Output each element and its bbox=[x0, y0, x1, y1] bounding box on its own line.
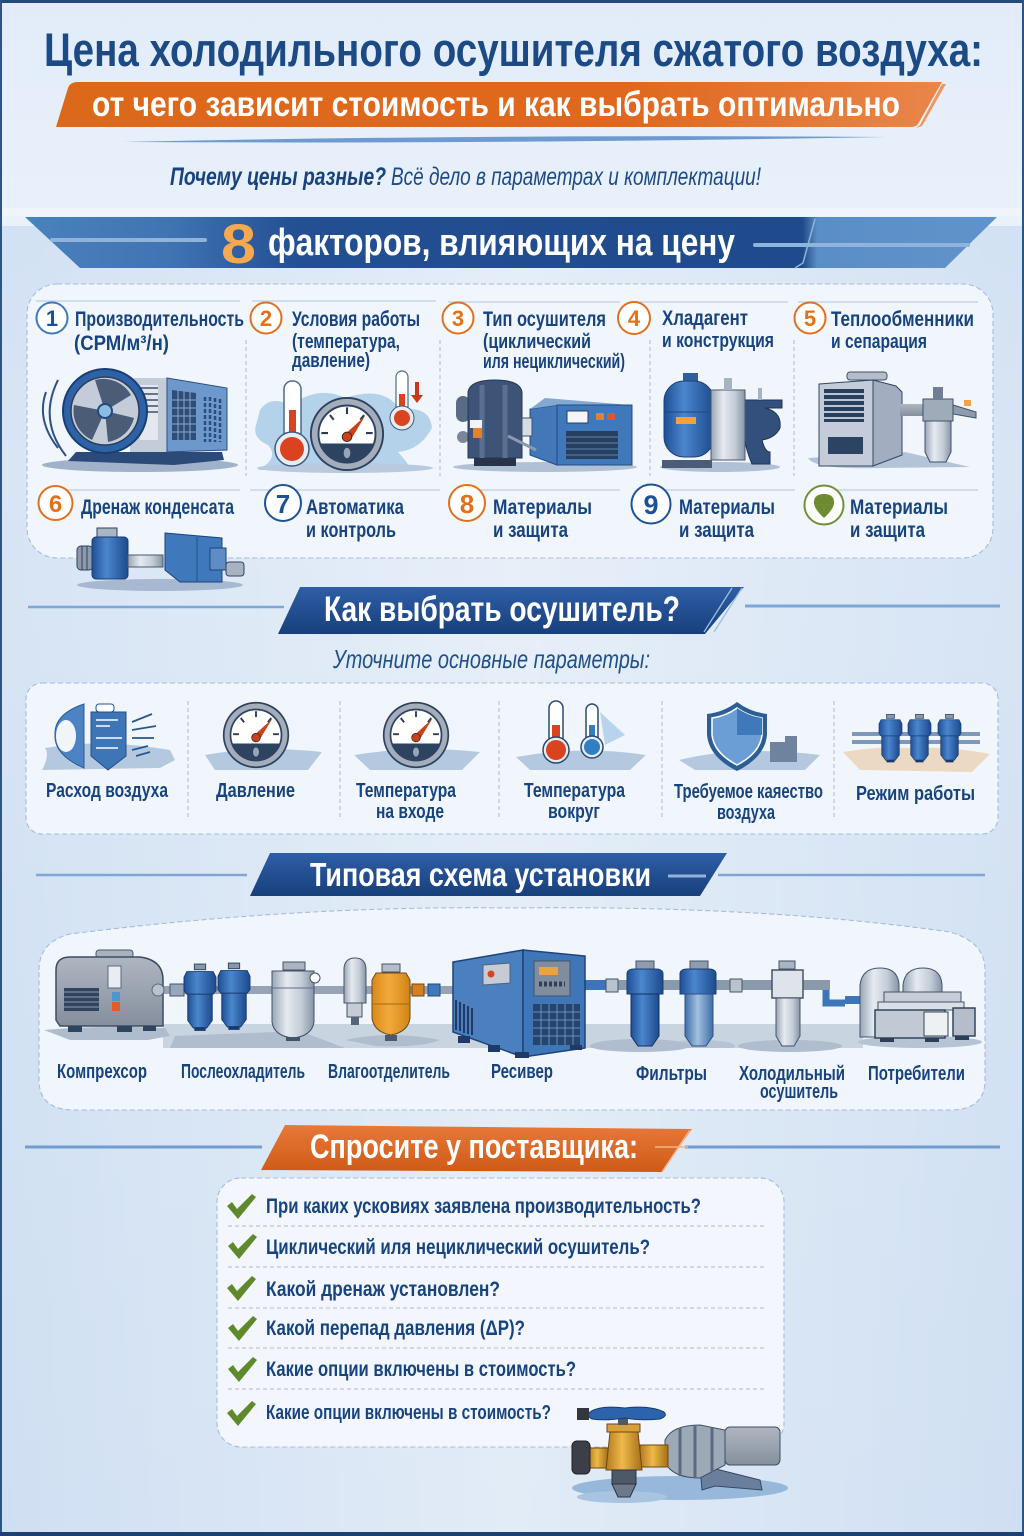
factor 7: Автоматика bbox=[306, 496, 404, 519]
tagline: Почему цены разные? bbox=[170, 163, 386, 191]
factor 1 bbox=[36, 302, 244, 472]
factor 2: давление) bbox=[292, 350, 370, 372]
factor 5: и сепарация bbox=[831, 331, 927, 353]
label: receiver: Ресивер bbox=[491, 1061, 553, 1083]
parameter: pressure bbox=[205, 702, 322, 802]
subheading: Уточните основные параметры: bbox=[332, 644, 650, 674]
factor 6 bbox=[38, 486, 244, 591]
factor 5: 5 bbox=[804, 306, 816, 331]
ground band bbox=[40, 1024, 984, 1064]
question 5: Какие опции включены в стоимость? bbox=[266, 1358, 576, 1381]
factor 10: и защита bbox=[850, 519, 925, 542]
parameter: air quality: Требуемое каяество bbox=[674, 781, 823, 803]
subtitle ribbon: от чего зависит стоимость и как выбрать оптимально bbox=[92, 85, 900, 124]
parameter: air quality: воздуха bbox=[717, 802, 776, 824]
factor 8: и защита bbox=[493, 519, 568, 542]
icon: compressor and dryer bbox=[453, 380, 637, 472]
factor 6: 6 bbox=[49, 491, 62, 518]
factor 8: 8 bbox=[460, 489, 474, 519]
icon: fan unit bbox=[42, 369, 238, 472]
banner: 8 factors bbox=[25, 212, 997, 275]
label: dryer: осушитель bbox=[760, 1081, 838, 1103]
separator: silver vessel bbox=[272, 962, 320, 1041]
factor 5: Теплообменники bbox=[831, 308, 974, 331]
parameter: ambient temperature: Температура bbox=[524, 780, 626, 802]
parameter: operating mode: Режим работы bbox=[856, 782, 975, 805]
question 2 bbox=[228, 1234, 650, 1259]
factor 3: Тип осушителя bbox=[483, 308, 606, 331]
heading: installation scheme bbox=[36, 853, 985, 896]
parameter: ambient temperature bbox=[516, 701, 646, 823]
panel: factors bbox=[27, 284, 993, 591]
factor 8: Материалы bbox=[493, 496, 592, 519]
parameter: ambient temperature: вокруг bbox=[548, 801, 600, 823]
aftercoolers bbox=[170, 963, 250, 1031]
label: dryer: Холодильный bbox=[739, 1063, 845, 1085]
consumers bbox=[860, 968, 975, 1042]
factor 4: 4 bbox=[628, 306, 641, 331]
tagline bbox=[170, 163, 761, 191]
parameter: inlet temperature: на входе bbox=[376, 801, 444, 823]
factor 4 bbox=[618, 302, 782, 472]
factor 3: иля нециклический) bbox=[483, 351, 625, 373]
factor 4: Хладагент bbox=[662, 307, 748, 330]
factor 3: (циклический bbox=[483, 331, 591, 353]
factor 10: Материалы bbox=[850, 496, 948, 519]
compressor bbox=[56, 950, 164, 1032]
factor 2: (температура, bbox=[292, 331, 400, 353]
parameter: air flow bbox=[42, 704, 175, 802]
parameter: air flow: Расход воздуха bbox=[46, 780, 169, 802]
heading: how to choose bbox=[28, 587, 1000, 634]
panel: installation scheme bbox=[39, 908, 985, 1110]
parameter: air quality bbox=[674, 702, 823, 824]
question 1 bbox=[227, 1194, 701, 1219]
factor 9 bbox=[632, 484, 775, 542]
factor 6: Дренаж конденсата bbox=[81, 496, 234, 519]
factor 8 bbox=[449, 485, 592, 542]
banner: 8 factors: факторов, влияющих на цену bbox=[268, 222, 735, 264]
question 2: Циклический иля нециклический осушитель? bbox=[266, 1236, 650, 1259]
question 4 bbox=[228, 1316, 525, 1341]
label: dryer bbox=[739, 1063, 845, 1103]
icon: valve and motor bbox=[572, 1407, 788, 1503]
filters bbox=[627, 961, 716, 1046]
factor 3 bbox=[442, 302, 637, 472]
label: consumers: Потребители bbox=[868, 1063, 965, 1085]
question 5 bbox=[228, 1357, 576, 1382]
refrigerated dryer bbox=[772, 961, 803, 1046]
receiver bbox=[453, 950, 585, 1058]
factor 2: Условия работы bbox=[292, 308, 420, 331]
parameter: operating mode bbox=[843, 714, 990, 805]
label: compressor: Компрехсор bbox=[57, 1061, 147, 1083]
question 6 bbox=[227, 1401, 551, 1426]
heading: installation scheme: Типовая схема установки bbox=[310, 856, 651, 893]
panel: parameters bbox=[26, 683, 998, 834]
label: aftercooler: Послеохладитель bbox=[181, 1061, 305, 1083]
factor 1: (СРМ/м³/н) bbox=[74, 332, 169, 355]
label: filters: Фильтры bbox=[636, 1063, 707, 1085]
factor 7: 7 bbox=[276, 489, 290, 519]
icon: heat exchanger and separator bbox=[808, 372, 976, 468]
parameter: pressure: Давление bbox=[216, 780, 295, 802]
subtitle ribbon bbox=[56, 82, 946, 142]
question 6: Какие опции включены в стоимость? bbox=[266, 1402, 551, 1424]
icon: thermometers and gauge bbox=[255, 371, 433, 473]
question 1: При каких усковиях заявлена производительность? bbox=[266, 1195, 701, 1218]
icon: tank and separator bbox=[660, 373, 782, 472]
parameter: inlet temperature: Температура bbox=[356, 780, 457, 802]
factor 2 bbox=[250, 302, 433, 473]
factor 9: Материалы bbox=[679, 496, 775, 519]
factor 10 bbox=[804, 486, 948, 542]
icon: condensate drain bbox=[77, 528, 244, 591]
panel: questions bbox=[217, 1178, 784, 1447]
factor 9: и защита bbox=[679, 519, 754, 542]
factor 7: и контроль bbox=[306, 519, 396, 542]
question 3 bbox=[227, 1276, 500, 1301]
factor 5 bbox=[794, 302, 976, 468]
parameter: inlet temperature bbox=[354, 702, 480, 823]
tagline: Всё дело в параметрах и комплектации! bbox=[391, 163, 761, 191]
label: separator: Влагоотделитель bbox=[328, 1061, 450, 1083]
factor 3: 3 bbox=[452, 306, 464, 331]
heading: ask the supplier: Спросите у поставщика: bbox=[310, 1128, 638, 1166]
factor 1: 1 bbox=[46, 306, 58, 331]
banner: 8 factors: 8 bbox=[221, 212, 256, 275]
factor 9: 9 bbox=[643, 490, 659, 520]
separators: narrow and orange bbox=[344, 958, 440, 1041]
factor 2: 2 bbox=[260, 306, 272, 331]
question 3: Какой дренаж установлен? bbox=[266, 1278, 500, 1301]
factor 4: и конструкция bbox=[662, 330, 774, 352]
heading: ask the supplier bbox=[25, 1125, 1000, 1172]
question 4: Какой перепад давления (ΔP)? bbox=[266, 1317, 525, 1340]
factor 7 bbox=[265, 485, 404, 542]
heading: how to choose: Как выбрать осушитель? bbox=[324, 590, 680, 629]
pipes bbox=[150, 979, 863, 1004]
factor 1: Производительность bbox=[75, 308, 244, 331]
